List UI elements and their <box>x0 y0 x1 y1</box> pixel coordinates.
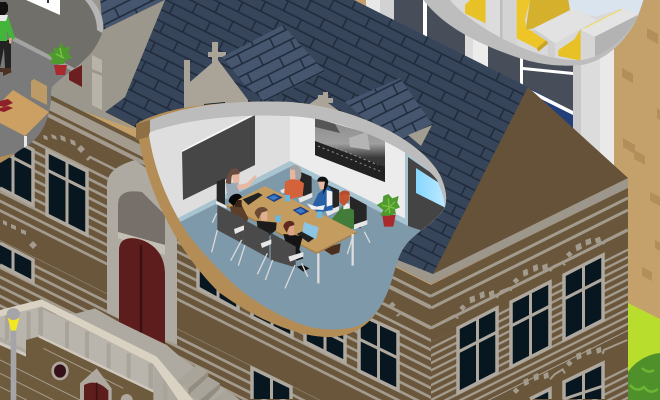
room interior <box>149 116 445 330</box>
window: right facade lower two <box>530 389 550 399</box>
picture <box>26 0 60 15</box>
table <box>0 90 49 151</box>
modern glass building <box>366 0 614 180</box>
woman, grey hair <box>284 165 304 200</box>
woman, long hair <box>226 168 257 199</box>
blackboard <box>182 113 255 200</box>
folders <box>266 193 283 202</box>
rim brown tip <box>136 120 150 140</box>
railing <box>0 299 193 400</box>
window: right facade two <box>511 282 550 367</box>
people and furniture <box>212 165 400 288</box>
window: right facade lower three <box>564 363 603 399</box>
window: under lens second <box>252 280 292 337</box>
second dormer gable with cross <box>298 92 352 120</box>
red accent on gable <box>69 65 82 87</box>
lens top grey rim <box>150 102 446 207</box>
small arched door <box>80 368 112 400</box>
window: right facade one <box>458 308 497 393</box>
table top <box>227 186 357 252</box>
man in green sweater <box>0 2 15 76</box>
window: lower centre <box>252 368 291 399</box>
back chairs <box>217 172 367 228</box>
right facade <box>431 180 631 400</box>
upper left light slate <box>100 0 165 30</box>
table legs <box>318 234 353 283</box>
right facade windows <box>458 255 603 399</box>
lens: upper floor with yellow seats <box>423 0 645 67</box>
door <box>119 238 165 344</box>
lower tan rim of left lens <box>0 153 16 163</box>
street lamp <box>7 308 20 400</box>
main lens: meeting room <box>130 100 460 340</box>
potted plant <box>48 42 72 75</box>
upper band, right part <box>380 267 431 332</box>
man, brown hair <box>254 207 277 236</box>
light slate dormer roof one <box>222 25 325 102</box>
window: left upper <box>47 151 87 235</box>
person, blue vest <box>307 177 333 213</box>
upper band, left part <box>38 96 144 173</box>
left facade <box>0 96 431 400</box>
brown gable end <box>431 87 628 284</box>
small dormer gable with cross <box>184 42 248 115</box>
front chairs <box>212 201 308 288</box>
light slate dormer roof two <box>345 78 433 145</box>
person, red beard <box>324 190 354 255</box>
window: under lens centre <box>305 283 345 362</box>
window: right facade three <box>564 255 603 340</box>
window: under lens right <box>359 314 398 390</box>
tree <box>620 353 660 400</box>
left wall <box>149 116 290 219</box>
gable coping band <box>393 178 628 284</box>
black and white poster <box>315 118 385 182</box>
window: far left lower <box>0 243 33 282</box>
middle band <box>0 216 368 400</box>
gable column near left lens <box>92 55 102 110</box>
chair <box>31 79 47 105</box>
oval window <box>51 362 69 380</box>
lens: left room with man, plant and table <box>0 0 110 170</box>
window: under lens left <box>198 230 238 310</box>
plant <box>377 194 400 227</box>
man, reddish hair <box>283 221 309 272</box>
items on table <box>243 193 322 242</box>
water glasses <box>275 195 322 222</box>
window arch ornaments, right facade <box>389 229 627 394</box>
right wall <box>290 116 445 230</box>
small gable tip <box>408 125 432 146</box>
window arch ornaments, left facade <box>3 134 140 249</box>
main slate roof <box>105 0 528 275</box>
laptops <box>243 193 263 205</box>
beige gable wall <box>0 0 165 130</box>
back chair armrests <box>216 186 367 229</box>
lens outer tan rim <box>136 102 446 337</box>
man, dark skin <box>228 194 248 226</box>
steps <box>177 365 237 400</box>
balustrade <box>0 307 153 392</box>
lower striped wall <box>0 337 153 400</box>
stairs <box>0 299 240 400</box>
lime lawn <box>628 303 660 400</box>
entrance portal <box>107 160 177 345</box>
skirting <box>174 161 410 227</box>
window: far left upper <box>0 133 33 205</box>
back chair legs <box>212 213 370 254</box>
left facade windows <box>0 133 398 399</box>
round vent <box>121 394 133 400</box>
door with window <box>405 152 445 230</box>
